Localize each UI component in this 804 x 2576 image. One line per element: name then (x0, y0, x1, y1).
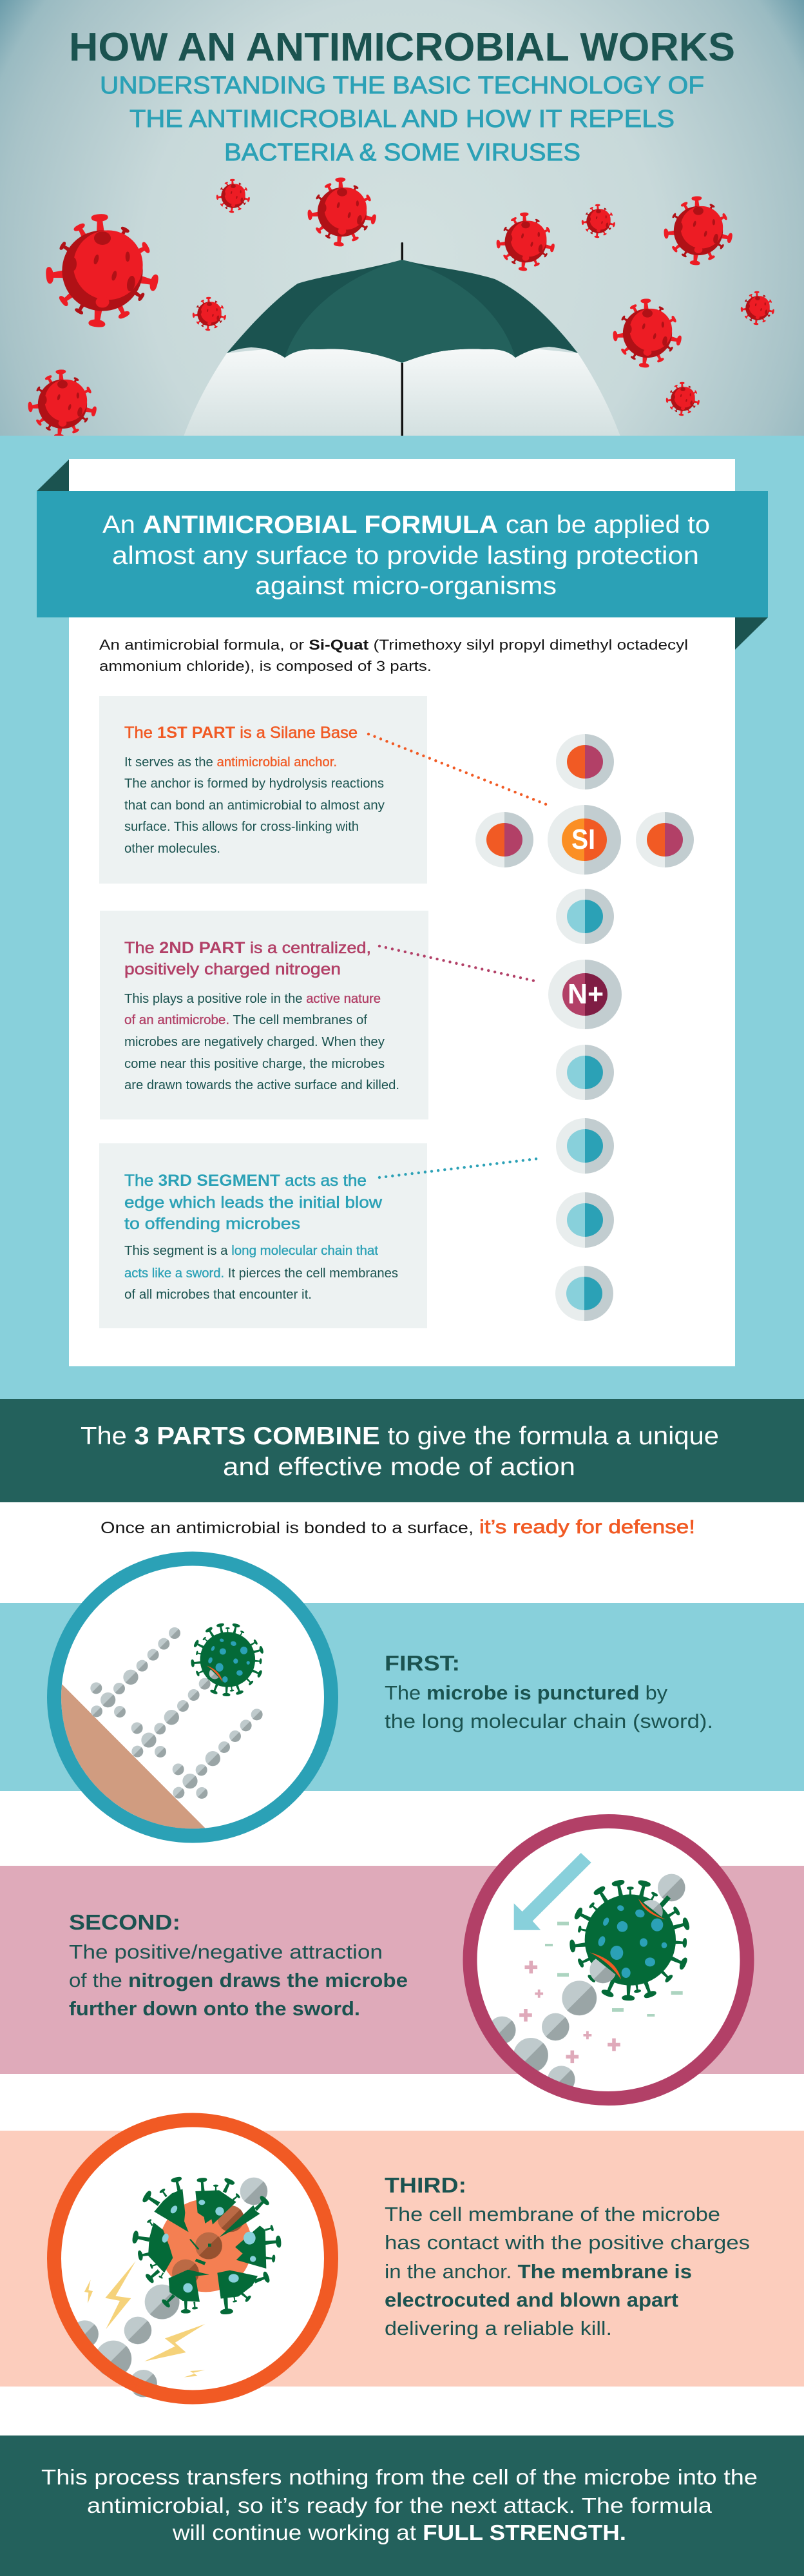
heading band: 3 parts combine: and effective mode of action (223, 1453, 575, 1481)
text: second step (69, 1911, 408, 2020)
microbe spots (161, 2200, 256, 2292)
panel: white sheet (69, 459, 735, 1366)
text: third step: in the anchor. The membrane is (385, 2261, 692, 2283)
surface wedge (61, 1684, 205, 1829)
heading: 2nd part: The 2ND PART is a centralized, (124, 939, 371, 957)
title: HOW AN ANTIMICROBIAL WORKS (69, 25, 735, 70)
positive charges (519, 1961, 620, 2063)
intro paragraph: An antimicrobial formula, or Si-Quat (Trimethoxy silyl propyl dimethyl octadecyl (99, 637, 688, 653)
atom: left (475, 812, 533, 867)
panel: 1st part (99, 696, 427, 884)
molecular chains (90, 1623, 264, 1799)
subtitle (100, 72, 704, 166)
white lower background (0, 1502, 804, 2436)
text: 3rd segment body (124, 1244, 398, 1302)
atom: teal 5 (555, 1266, 613, 1321)
exposed microbe core (159, 2199, 252, 2292)
text: second step: The positive/negative attraction (69, 1941, 383, 1963)
illustration: puncture circle (39, 1558, 331, 1856)
atom: teal 2 (556, 1045, 614, 1100)
microbe fragments (131, 2176, 282, 2315)
subtitle: BACTERIA & SOME VIRUSES (224, 139, 580, 166)
banner: antimicrobial formula: against micro-organisms (255, 572, 557, 600)
heading: 2nd part: positively charged nitrogen (124, 960, 341, 978)
hero background (0, 0, 804, 436)
text: 2nd part body: of an antimicrobe. The cell membranes of (124, 1013, 367, 1027)
illustration: electrocution circle (54, 2120, 331, 2397)
dotted connector: 1st part (368, 734, 548, 805)
text: 2nd part body: This plays a positive role in the active nature (124, 992, 381, 1006)
atom: teal 4 (556, 1192, 614, 1248)
footer band: will continue working at FULL STRENGTH. (172, 2521, 626, 2544)
text: third step (385, 2174, 750, 2339)
intro paragraph: ammonium chloride), is composed of 3 parts. (99, 658, 432, 674)
lead-in text (100, 1516, 695, 1538)
text: third step: delivering a reliable kill. (385, 2318, 612, 2339)
icon: green microbe (569, 1879, 691, 2001)
atom: teal 3 (556, 1118, 614, 1174)
atom: top (556, 734, 614, 789)
atom: right (636, 812, 694, 867)
text: 1st part body: other molecules. (124, 842, 220, 856)
text: 2nd part body (124, 992, 399, 1092)
atom: SI: SI (571, 824, 595, 855)
puncture slash (207, 1665, 223, 1682)
molecule discs (71, 2178, 267, 2397)
atom: teal 1 (556, 889, 614, 944)
text: first step (385, 1652, 713, 1732)
atom: SI (548, 805, 621, 875)
text: 3rd segment body: of all microbes that encounter it. (124, 1288, 312, 1302)
band: first (0, 1603, 804, 1791)
heading band: 3 parts combine: The 3 PARTS COMBINE to give the formula a unique (81, 1422, 719, 1450)
text: 3rd segment body: acts like a sword. It pierces the cell membranes (124, 1266, 398, 1281)
text: 2nd part body: microbes are negatively charged. When they (124, 1035, 385, 1049)
heading band: 3 parts combine (0, 1399, 804, 1502)
text: third step: THIRD: (385, 2174, 466, 2198)
footer band: antimicrobial, so it’s ready for the next attack. The formula (87, 2494, 713, 2517)
text: first step: FIRST: (385, 1652, 460, 1676)
ribbon fold: bottom right (735, 617, 768, 650)
molecule diagram (475, 734, 694, 1321)
text: second step: further down onto the sword. (69, 1998, 360, 2020)
footer band: This process transfers nothing from the cell of the microbe into the (41, 2465, 758, 2489)
dotted connector: 2nd part (379, 946, 535, 981)
heading: 3rd segment: The 3RD SEGMENT acts as the (124, 1172, 367, 1190)
text: 1st part body: It serves as the antimicrobial anchor. (124, 755, 337, 770)
text: 1st part body: The anchor is formed by hydrolysis reactions (124, 777, 384, 791)
intro paragraph (99, 637, 688, 674)
banner: antimicrobial formula (37, 491, 768, 617)
lead-in text: it’s ready for defense! (479, 1516, 695, 1538)
arrow (514, 1853, 591, 1930)
negative charges (545, 1922, 683, 2017)
text: third step: electrocuted and blown apart (385, 2289, 678, 2311)
teal panel background (0, 436, 804, 1399)
molecule discs (488, 1874, 685, 2093)
text: third step: has contact with the positive charges (385, 2232, 750, 2254)
text: second step: of the nitrogen draws the microbe (69, 1970, 408, 1991)
footer band (0, 2436, 804, 2576)
text: 2nd part body: are drawn towards the active surface and killed. (124, 1078, 399, 1092)
text: first step: the long molecular chain (sword). (385, 1710, 713, 1732)
icon: green microbe (191, 1623, 264, 1696)
text: 3rd segment body: This segment is a long molecular chain that (124, 1244, 378, 1258)
atom: N+ (548, 960, 622, 1029)
text: 2nd part body: come near this positive charge, the microbes (124, 1057, 385, 1071)
lightning bolts (84, 2261, 205, 2377)
subtitle: UNDERSTANDING THE BASIC TECHNOLOGY OF (100, 72, 704, 99)
heading: 2nd part (124, 939, 371, 978)
heading: 1st part: The 1ST PART is a Silane Base (124, 724, 358, 742)
band: second (0, 1866, 804, 2074)
red virus icons (28, 177, 774, 439)
heading: 3rd segment: edge which leads the initial blow (124, 1194, 383, 1212)
text: second step: SECOND: (69, 1911, 180, 1935)
heading: 3rd segment: to offending microbes (124, 1215, 300, 1233)
atom: N+: N+ (568, 978, 604, 1010)
ring (54, 1558, 331, 1835)
text: first step: The microbe is punctured by (385, 1682, 668, 1704)
dotted connector: 3rd segment (379, 1158, 542, 1177)
ribbon fold: top left (37, 460, 69, 491)
text: 1st part body (124, 755, 385, 856)
band: third (0, 2131, 804, 2387)
ring (54, 2120, 331, 2397)
banner: antimicrobial formula: An ANTIMICROBIAL FORMULA can be applied to (102, 511, 710, 539)
puncture slashes (589, 1952, 621, 1979)
panel: 2nd part (100, 911, 428, 1119)
text: 1st part body: that can bond an antimicrobial to almost any (124, 799, 385, 813)
heading: 3rd segment (124, 1172, 383, 1233)
illustration: attraction circle (470, 1821, 747, 2098)
lead-in text: Once an antimicrobial is bonded to a surface, (100, 1519, 474, 1537)
ring (470, 1821, 747, 2098)
text: third step: The cell membrane of the microbe (385, 2203, 720, 2225)
panel: 3rd segment (99, 1143, 427, 1328)
icon: umbrella (184, 242, 620, 436)
text: 1st part body: surface. This allows for cross-linking with (124, 820, 359, 834)
subtitle: THE ANTIMICROBIAL AND HOW IT REPELS (129, 106, 675, 133)
banner: antimicrobial formula: almost any surface to provide lasting protection (112, 542, 699, 570)
